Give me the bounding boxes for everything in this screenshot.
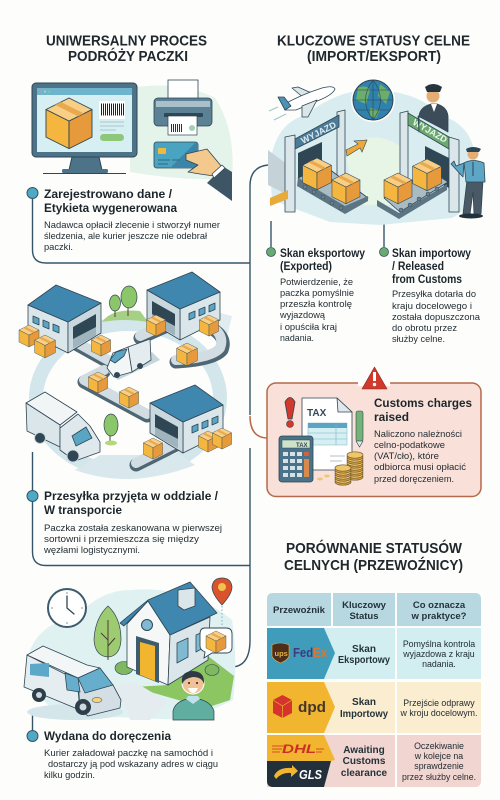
step: registered data — [27, 187, 220, 253]
step: registered data: Zarejestrowano dane / — [44, 187, 173, 201]
step: parcel accepted — [27, 489, 222, 556]
row: DHL and GLS: clearance — [341, 768, 388, 779]
import gate: WYJAZD — [411, 117, 449, 145]
icon: pen — [356, 411, 363, 447]
step: parcel accepted: węzłami logistycznymi. — [43, 545, 140, 556]
icon: airplane — [269, 87, 335, 120]
row: UPS and FedEx: wyjazdowa z kraju — [402, 649, 475, 659]
step: out for delivery — [27, 729, 218, 781]
table header: Kluczowy — [342, 600, 387, 611]
icon: warning triangle — [362, 367, 387, 389]
icon: courier van — [24, 646, 123, 720]
step: import scan — [380, 246, 481, 345]
logo: UPS: ups — [274, 649, 288, 658]
icon: box truck — [26, 392, 100, 462]
icon: calculator — [279, 436, 313, 482]
table header: Status — [349, 611, 379, 622]
title: key customs statuses: (IMPORT/EKSPORT) — [307, 48, 441, 65]
title: key customs statuses — [277, 32, 470, 65]
icon: payment card and hand — [154, 142, 232, 201]
step: registered data: paczki. — [44, 242, 73, 253]
illustration: customs gates — [268, 78, 485, 225]
conveyor belts — [74, 320, 223, 465]
title: universal process — [46, 32, 207, 65]
logo: GLS: GLS — [299, 767, 322, 782]
step: registered data: Etykieta wygenerowana — [44, 201, 177, 215]
table header: Przewoźnik — [273, 605, 326, 616]
row: DPD: Przejście odprawy — [403, 698, 475, 708]
import gate — [377, 111, 459, 219]
icon: label printer — [154, 80, 212, 135]
illustration: online registration — [32, 80, 233, 201]
icon: globe — [351, 78, 395, 122]
row: UPS and FedEx: Eksportowy — [338, 655, 390, 666]
step: out for delivery: Kurier załadował paczkę na samochód i — [44, 748, 213, 759]
icon: wall clock — [48, 589, 86, 627]
step: export scan: Potwierdzenie, że — [280, 277, 353, 288]
logo: DPD wordmark: dpd — [298, 699, 326, 716]
row: DHL and GLS — [267, 735, 481, 787]
callout text: przed doręczeniem. — [374, 474, 454, 485]
icon: tree — [94, 606, 219, 676]
callout text: celno-podatkowe — [374, 440, 445, 451]
step: out for delivery: Wydana do doręczenia — [44, 729, 171, 743]
row: DHL and GLS: Customs — [343, 756, 386, 767]
callout text: (VAT/cło), które — [374, 451, 439, 462]
step: import scan: / Released — [392, 259, 444, 273]
step: import scan: kraju docelowego i — [392, 301, 472, 312]
title: key customs statuses: KLUCZOWE STATUSY CELNE — [277, 32, 470, 50]
icon: house — [120, 582, 217, 685]
step: import scan: służby celne. — [392, 334, 445, 345]
title: comparison of customs statuses — [284, 539, 463, 574]
logo: DHL — [272, 742, 324, 756]
icon: red exclamation mark — [285, 398, 295, 428]
callout text: Naliczono należności — [374, 429, 462, 440]
step: import scan: została dopuszczona — [392, 312, 481, 323]
step: export scan: przeszła kontrolę — [280, 299, 352, 310]
table header: w praktyce? — [411, 611, 467, 622]
warehouse: top right — [147, 272, 220, 340]
callout text: Customs charges — [374, 396, 472, 410]
title: comparison of customs statuses: CELNYCH (PRZEWOŹNICY) — [284, 557, 463, 574]
row: DPD: Importowy — [340, 709, 388, 720]
icon: orange arrow — [346, 140, 367, 156]
row: DHL and GLS: w kolejce na — [414, 751, 463, 761]
callout: package speech bubble — [200, 628, 232, 658]
row: DHL and GLS: Awaiting — [343, 745, 385, 756]
title: universal process: UNIWERSALNY PROCES — [46, 32, 207, 50]
packages — [19, 315, 232, 459]
step: registered data: Nadawca opłacił zlecenie i stworzył numer — [44, 220, 220, 231]
export gate — [270, 110, 368, 214]
step: parcel accepted: Przesyłka przyjęta w oddziale / — [44, 489, 219, 503]
logo: FedEx: FedEx — [293, 646, 327, 660]
panel: customs charges raised — [267, 367, 481, 496]
callout text: odbiorca musi opłacić — [374, 462, 466, 473]
step: parcel accepted: W transporcie — [44, 503, 122, 517]
step: import scan: do obrotu przez — [392, 323, 457, 334]
step: export scan: nadania. — [280, 333, 314, 344]
row: DPD — [267, 682, 481, 733]
row: DHL and GLS: przez służby celne. — [402, 772, 476, 782]
warehouse: bottom right — [150, 385, 223, 453]
row: UPS and FedEx: Skan — [352, 644, 376, 655]
icon: calculator: TAX — [296, 443, 308, 449]
warehouse: left — [28, 285, 101, 353]
step: export scan — [266, 246, 365, 344]
row: DHL and GLS: Oczekiwanie — [414, 741, 464, 751]
icon: trees — [104, 286, 137, 446]
step: parcel accepted: Paczka została zeskanowana w pierwszej — [44, 523, 222, 534]
connector line: process timeline — [32, 165, 384, 731]
logo: GLS — [274, 765, 322, 782]
icon: tax document: TAX — [307, 408, 327, 419]
row: DPD: w kroju docelowym. — [399, 708, 478, 718]
title: comparison of customs statuses: PORÓWNANIE STATUSÓW — [286, 539, 463, 557]
title: universal process: PODRÓŻY PACZKI — [68, 47, 188, 65]
step: export scan: (Exported) — [280, 259, 332, 273]
step: out for delivery: kilku godzin. — [44, 770, 95, 781]
icon: customs officer in blue uniform — [451, 147, 485, 218]
logo: DPD cube — [273, 695, 292, 718]
table: carriers comparison — [267, 593, 481, 787]
step: export scan: wyjazdową — [279, 310, 326, 321]
step: registered data: śledzenia, ale kurier jeszcze nie odebrał — [44, 231, 208, 242]
table header — [267, 593, 481, 626]
icon: tax document — [302, 398, 352, 470]
row: UPS and FedEx: Pomyślna kontrola — [403, 639, 475, 649]
callout text: raised — [374, 410, 409, 424]
row: UPS and FedEx — [267, 628, 481, 679]
icon: delivery van — [107, 339, 160, 380]
icon: location pin — [212, 578, 232, 626]
row: DHL and GLS: sprawdzenie — [414, 761, 464, 771]
callout text — [374, 396, 472, 485]
step: export scan: Skan eksportowy — [280, 246, 365, 260]
export gate: WYJAZD — [299, 119, 338, 146]
logo: DHL: DHL — [282, 742, 316, 756]
logo: UPS — [272, 643, 289, 663]
step: import scan: Skan importowy — [392, 246, 471, 260]
step: parcel accepted: sortowni i przemieszcza się między — [44, 534, 199, 545]
icon: computer monitor — [32, 83, 137, 174]
icon: coin stacks — [317, 452, 363, 485]
row: UPS and FedEx: nadania. — [422, 659, 456, 669]
icon: customs officer in dark uniform — [418, 84, 448, 132]
icon: recipient — [173, 671, 214, 720]
illustration: home delivery — [24, 578, 235, 720]
table header: Co oznacza — [413, 600, 466, 611]
step: export scan: paczka pomyślnie — [280, 288, 354, 299]
step: export scan: i opuściła kraj — [280, 322, 337, 333]
step: out for delivery: dostarczy ją pod wskazany adres w ciągu — [48, 759, 218, 770]
step: import scan: Przesyłka dotarła do — [392, 289, 476, 300]
row: DPD: Skan — [352, 697, 376, 708]
illustration: logistics network — [19, 272, 232, 479]
step: import scan: from Customs — [392, 272, 462, 286]
